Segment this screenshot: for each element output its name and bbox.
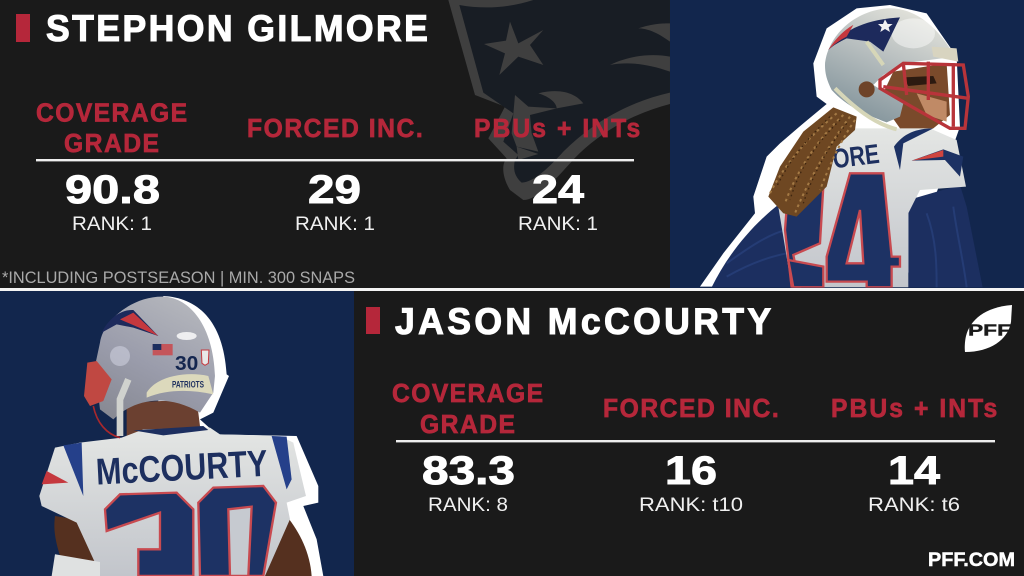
value: forced incompletions: 16 [665, 449, 717, 493]
chin strap [835, 42, 897, 129]
label: coverage grade: COVERAGE [36, 99, 187, 128]
value: forced incompletions: 29 [308, 168, 361, 212]
shoulder stripes [63, 443, 83, 496]
rank: forced incompletions: RANK: 1 [295, 213, 375, 235]
facemask [880, 62, 968, 128]
sleeves [712, 206, 790, 288]
label: forced incompletions: FORCED INC. [603, 394, 779, 423]
footnote: *INCLUDING POSTSEASON | MIN. 300 SNAPS [2, 269, 355, 287]
label: coverage grade: COVERAGE [392, 379, 543, 408]
value: PBUs and INTs: 24 [532, 168, 585, 212]
white outline halo [700, 5, 960, 287]
NFL shield decal [201, 350, 209, 365]
helmet logo [828, 17, 900, 52]
accent bar [16, 14, 30, 42]
watermark: Patriots logo [448, 0, 670, 200]
wrist band [52, 554, 100, 576]
heading: Jason McCourty [366, 300, 771, 342]
collar [133, 426, 208, 435]
helmet shell [95, 297, 215, 419]
label: forced incompletions: FORCED INC. [247, 114, 423, 143]
panel: bottom dark panel [354, 291, 1024, 576]
logo: PFF football [965, 305, 1012, 352]
jersey [777, 128, 966, 287]
hair [768, 107, 857, 217]
logo letters: PFF [968, 322, 1011, 340]
jersey [39, 428, 306, 576]
divider between sections [0, 288, 1024, 291]
stats: Gilmore [36, 99, 640, 235]
stats: McCourty [392, 379, 997, 516]
label: PBUs and INTs: PBUs + INTs [831, 394, 997, 423]
facemask [84, 361, 112, 406]
jersey number [105, 493, 193, 576]
rule [396, 440, 995, 442]
site mark: PFF.COM: PFF.COM [928, 549, 1015, 571]
rank: forced incompletions: RANK: t10 [639, 494, 743, 516]
rank: PBUs and INTs: RANK: t6 [868, 494, 960, 516]
sleeve wrinkles [727, 207, 967, 287]
bumper text: PATRIOTS [172, 380, 204, 390]
shoulder stripe [894, 128, 933, 170]
heading: Stephon Gilmore [16, 7, 428, 49]
helmet highlights [177, 332, 197, 340]
ear hole [859, 81, 875, 97]
value: coverage grade: 83.3 [422, 449, 515, 493]
bumper plate [147, 374, 213, 398]
rule [36, 159, 634, 161]
rank: coverage grade: RANK: 8 [428, 494, 508, 516]
helmet shell [825, 8, 955, 122]
jersey name: McCOURTY [95, 442, 269, 493]
neck [127, 399, 213, 436]
accent bar [366, 307, 380, 334]
side strap [120, 379, 128, 436]
flag decal [153, 344, 173, 355]
label: grade: GRADE [64, 129, 159, 158]
shoulder logo [42, 471, 68, 484]
skin arms [54, 516, 100, 563]
photo: Jason McCourty illustration [39, 296, 323, 576]
chin strap cord [93, 406, 120, 438]
visor clip [932, 47, 958, 62]
label: grade: GRADE [420, 410, 515, 439]
panel: bottom navy photo background [0, 291, 354, 576]
player name: JASON McCOURTY [395, 300, 771, 342]
rank: PBUs and INTs: RANK: 1 [518, 213, 598, 235]
player name: STEPHON GILMORE [46, 7, 428, 49]
label: PBUs and INTs: PBUs + INTs [474, 114, 640, 143]
jersey name: ORE [831, 138, 881, 174]
rank: coverage grade: RANK: 1 [72, 213, 152, 235]
panel: top navy photo background [670, 0, 1024, 288]
helmet highlight [892, 18, 935, 48]
white outline halo [150, 296, 323, 576]
jersey number [827, 173, 900, 287]
photo: Stephon Gilmore illustration [700, 5, 983, 287]
value: PBUs and INTs: 14 [888, 449, 941, 493]
value: coverage grade: 90.8 [65, 168, 160, 212]
helmet number: 30 [175, 352, 198, 375]
helmet stripe logo [102, 310, 158, 336]
shoulder logo [912, 149, 963, 177]
face [880, 63, 950, 128]
background: top dark panel [0, 0, 670, 288]
